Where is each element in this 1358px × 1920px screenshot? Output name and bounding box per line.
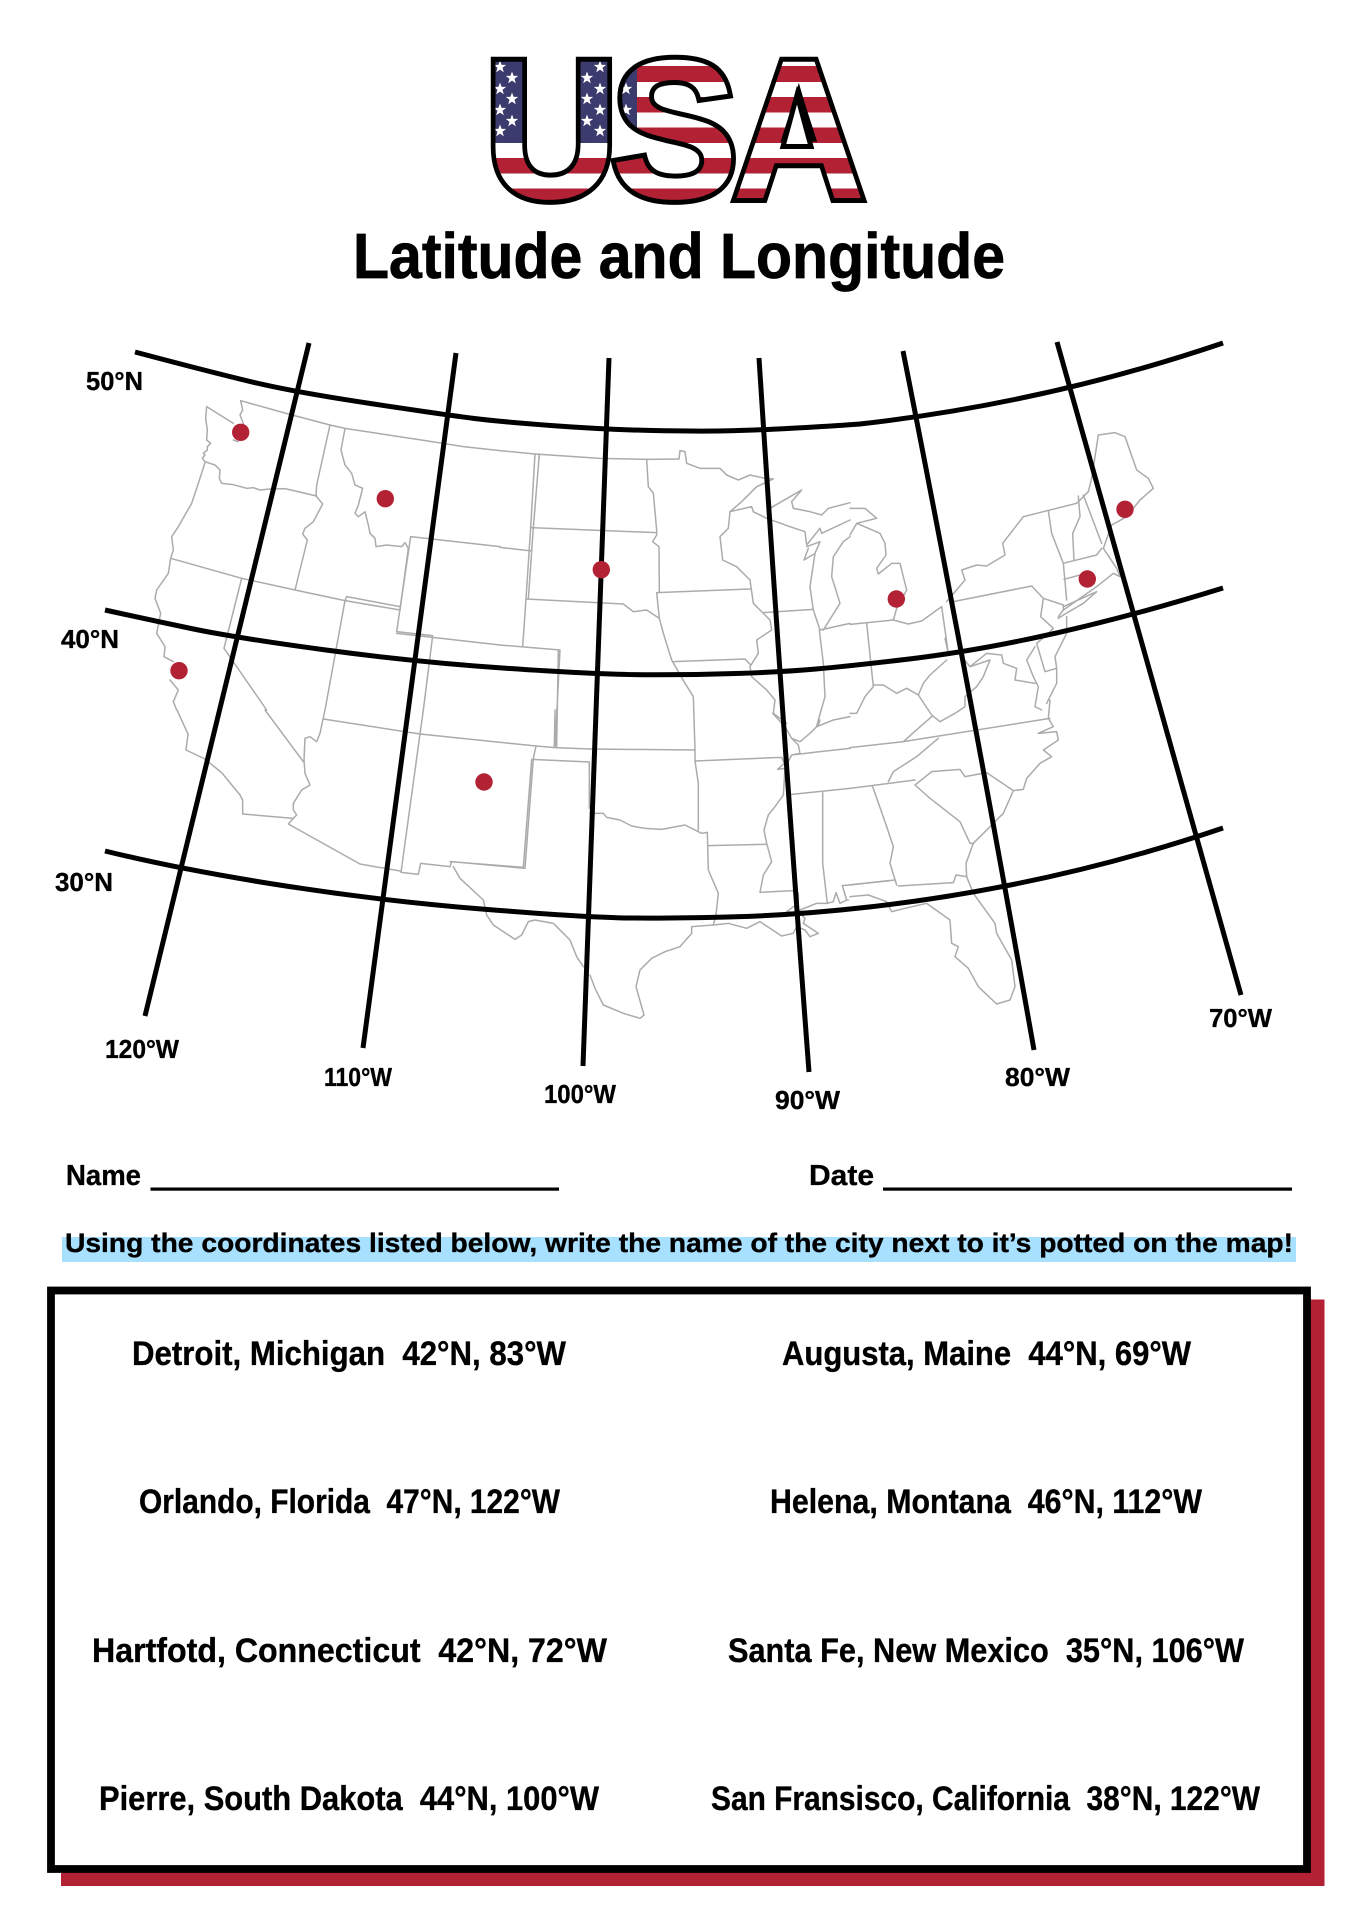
longitude labels: 100°W	[544, 1079, 616, 1109]
right column of coordinates: Augusta, Maine 44°N, 69°W	[782, 1335, 1192, 1373]
latitude labels	[55, 366, 143, 897]
longitude labels: 90°W	[775, 1085, 840, 1115]
longitude labels	[105, 1003, 1272, 1115]
latitude and longitude grid lines	[105, 342, 1241, 1072]
northeast states	[850, 433, 1153, 722]
longitude labels: 80°W	[1005, 1062, 1070, 1092]
map of USA with state borders	[155, 401, 1153, 1018]
northwest states	[155, 401, 500, 710]
left column of coordinates: Pierre, South Dakota 44°N, 100°W	[99, 1780, 600, 1818]
left column of coordinates: Hartfotd, Connecticut 42°N, 72°W	[92, 1632, 608, 1670]
left column of coordinates: Detroit, Michigan 42°N, 83°W	[132, 1335, 567, 1373]
south central states	[590, 713, 890, 1018]
title: USA: U	[484, 19, 619, 240]
title: USA: S	[610, 19, 739, 241]
southeast states	[850, 700, 1058, 1004]
latitude labels: 50°N	[86, 366, 143, 396]
subtitle: Latitude and Longitude: Latitude and Longitude	[353, 220, 1005, 292]
name field: Name	[66, 1160, 141, 1192]
right column of coordinates	[711, 1335, 1261, 1818]
longitude labels: 110°W	[324, 1062, 392, 1092]
right column of coordinates: San Fransisco, California 38°N, 122°W	[711, 1780, 1261, 1818]
date field: Date	[809, 1160, 874, 1192]
latitude labels: 30°N	[55, 867, 113, 897]
city dots	[170, 424, 1134, 791]
panel: coordinates list	[51, 1290, 1307, 1869]
name field	[66, 1160, 559, 1192]
right column of coordinates: Helena, Montana 46°N, 112°W	[770, 1483, 1203, 1521]
longitude labels: 120°W	[105, 1034, 179, 1064]
left column of coordinates: Orlando, Florida 47°N, 122°W	[139, 1483, 561, 1521]
title: USA	[490, 54, 868, 205]
instruction text with highlight: Using the coordinates listed below, write the name of the city next to it’s potted on the map!	[65, 1228, 1293, 1258]
title: USA: A	[732, 18, 866, 240]
date field	[809, 1160, 1292, 1192]
left column of coordinates	[92, 1335, 608, 1818]
southern California	[177, 710, 240, 795]
latitude labels: 40°N	[61, 624, 119, 654]
southwest states	[240, 710, 590, 967]
right column of coordinates: Santa Fe, New Mexico 35°N, 106°W	[728, 1632, 1245, 1670]
panel shadow	[61, 1300, 1324, 1886]
longitude labels: 70°W	[1209, 1003, 1272, 1033]
north central states	[500, 451, 850, 750]
